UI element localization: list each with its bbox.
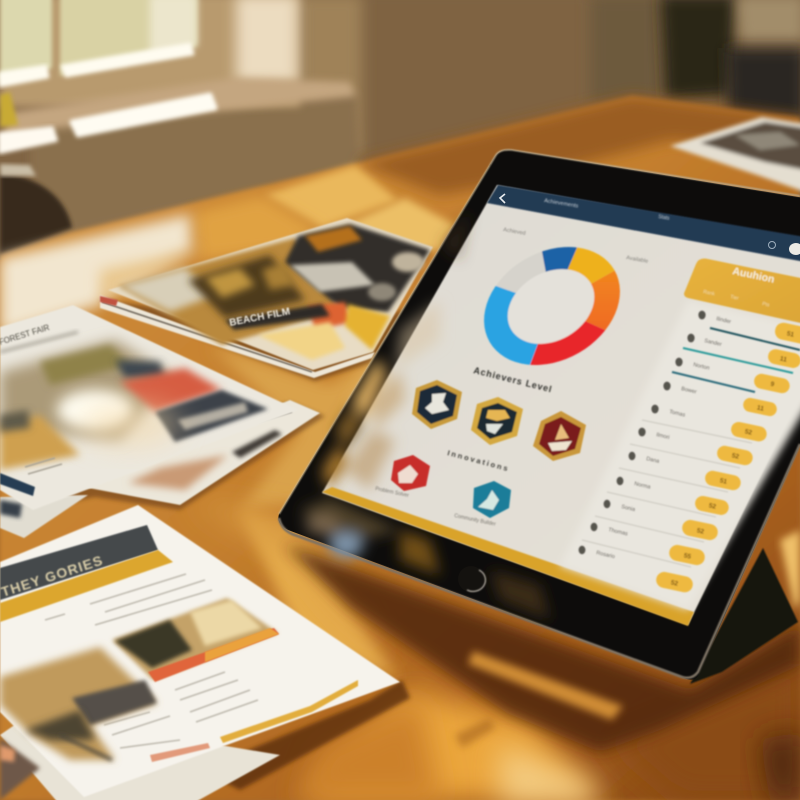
tablet body: [278, 150, 800, 680]
top sheet: [0, 505, 400, 797]
white glare on table: [0, 214, 192, 335]
row names: Thomas: [608, 527, 629, 537]
heading: achievements: Achievers Level: [473, 365, 553, 394]
back arrow: [500, 194, 505, 203]
background: room wall: [0, 0, 800, 260]
wood knot: [455, 718, 495, 748]
badge: red helmet: [533, 411, 586, 461]
screen: [322, 185, 800, 625]
photo two: [0, 647, 157, 760]
back flyer photo: [188, 255, 305, 318]
heading: innovations: Innovations: [446, 448, 509, 473]
badge label: red: Problem Solver: [375, 486, 410, 499]
segment: orange: [584, 270, 621, 331]
nav icons: [768, 242, 776, 248]
row names: Rosario: [596, 550, 615, 560]
donut center: [494, 254, 608, 359]
back flyer title block: [225, 304, 330, 330]
row names: Tomas: [669, 409, 686, 419]
tablet lower metal edge: [279, 444, 800, 678]
header gold band: [0, 550, 173, 622]
gold header: Tier: [730, 294, 739, 302]
back flyer dark panel: [285, 224, 430, 312]
pill values: 11: [756, 404, 765, 413]
lower left sheet: [0, 495, 88, 538]
bezel reflections: [300, 210, 550, 620]
segment: red: [529, 320, 606, 366]
pill values: [670, 330, 795, 588]
pill values: 51: [786, 330, 795, 339]
back flyer red and gold blocks: [308, 302, 352, 330]
donut label left: Achieved: [503, 227, 526, 237]
middle flyer photo: [0, 340, 175, 440]
pill values: 52: [696, 527, 705, 536]
nav title: Achievements: [544, 198, 579, 210]
pill values: 52: [670, 579, 679, 588]
segment: light blue: [483, 285, 538, 366]
leaderboard panel: [560, 259, 800, 610]
flyer: back stack: [98, 218, 433, 381]
sun streak in shadow: [468, 651, 623, 720]
gold bar: [220, 680, 358, 743]
leaderboard rows background: [560, 300, 800, 610]
corner photo lower: [0, 738, 40, 800]
lower sun glow: [300, 690, 600, 800]
screen sun reflections: [345, 300, 440, 490]
flyer: foreground: [0, 505, 410, 800]
row names: Ilmori: [656, 432, 670, 441]
donut chart: [483, 227, 648, 366]
gold header: Rank: [703, 289, 716, 297]
row names: Bower: [681, 386, 697, 395]
pill values: 52: [708, 502, 717, 511]
segment: dark blue: [541, 246, 578, 272]
back right magazine: [670, 117, 800, 192]
badge: navy knight: [412, 380, 462, 429]
pill values: 55: [683, 552, 692, 561]
table far edge: [357, 96, 800, 195]
left bezel rim: [279, 165, 490, 514]
chair back: [0, 164, 72, 254]
row avatars: [579, 311, 706, 554]
tablet top edge highlight: [490, 150, 800, 196]
pill values: 51: [719, 477, 728, 486]
gold header: Pts: [762, 301, 770, 309]
row names: Ilinder: [716, 316, 732, 325]
back flyer stacked sheets: [100, 295, 375, 378]
window pane highlights: [62, 44, 193, 76]
row dividers: [582, 420, 752, 567]
home button: [458, 566, 485, 592]
tablet: [278, 150, 800, 680]
segment: yellow: [567, 246, 616, 284]
row names: Norton: [693, 362, 710, 372]
tablet stand: [690, 548, 798, 684]
pill values: 52: [744, 428, 753, 437]
flyer: back stack: BEACH FILM: [228, 306, 291, 329]
glare on flyer: [57, 390, 133, 430]
row score pills: [655, 321, 800, 594]
underlying sheets: [78, 400, 320, 505]
top sheet: [0, 305, 298, 510]
badge: red small: [391, 455, 430, 491]
back flyer page: [108, 218, 433, 370]
gold header: Auuhion: [731, 265, 776, 286]
header title: THEY GORIES: [0, 552, 105, 600]
back flyer shadow: [98, 300, 433, 381]
row names: Sonia: [621, 504, 637, 513]
pill values: 11: [779, 355, 788, 364]
row names: [596, 316, 732, 560]
segment: grey: [495, 251, 546, 294]
navy footer block: [0, 473, 35, 496]
row names: Norma: [634, 481, 652, 491]
foreground flyer shadow: [200, 680, 410, 790]
yellow plant leaf: [0, 92, 18, 127]
badge label: teal: Community Builder: [454, 513, 496, 528]
window sill: [0, 78, 356, 140]
flyer lines: [25, 458, 62, 474]
tablet cast shadow: [285, 545, 800, 752]
pill values: 52: [731, 452, 740, 461]
text lines: [45, 574, 258, 748]
middle flyer shadow: [20, 402, 325, 512]
row names: Sander: [704, 338, 722, 348]
window with frame and sill: [0, 0, 356, 152]
sun patches: [265, 165, 398, 228]
gold header: [684, 259, 800, 325]
donut label right: Available: [626, 255, 649, 265]
photo one: [112, 598, 278, 680]
progress streaks: [672, 328, 800, 392]
sunlight on sill: [72, 95, 215, 135]
header dark band: [0, 525, 158, 600]
lower sheet: [0, 680, 280, 800]
pill values: 9: [770, 381, 775, 388]
row names: Dana: [646, 456, 661, 465]
screen bottom gold strip: [322, 487, 694, 626]
badge: gold helmet: [471, 397, 523, 445]
flyer: middle left stack: [0, 305, 325, 538]
nav label: Stats: [658, 214, 670, 222]
navigation bar: [487, 185, 800, 262]
badge: teal small: [473, 481, 511, 518]
